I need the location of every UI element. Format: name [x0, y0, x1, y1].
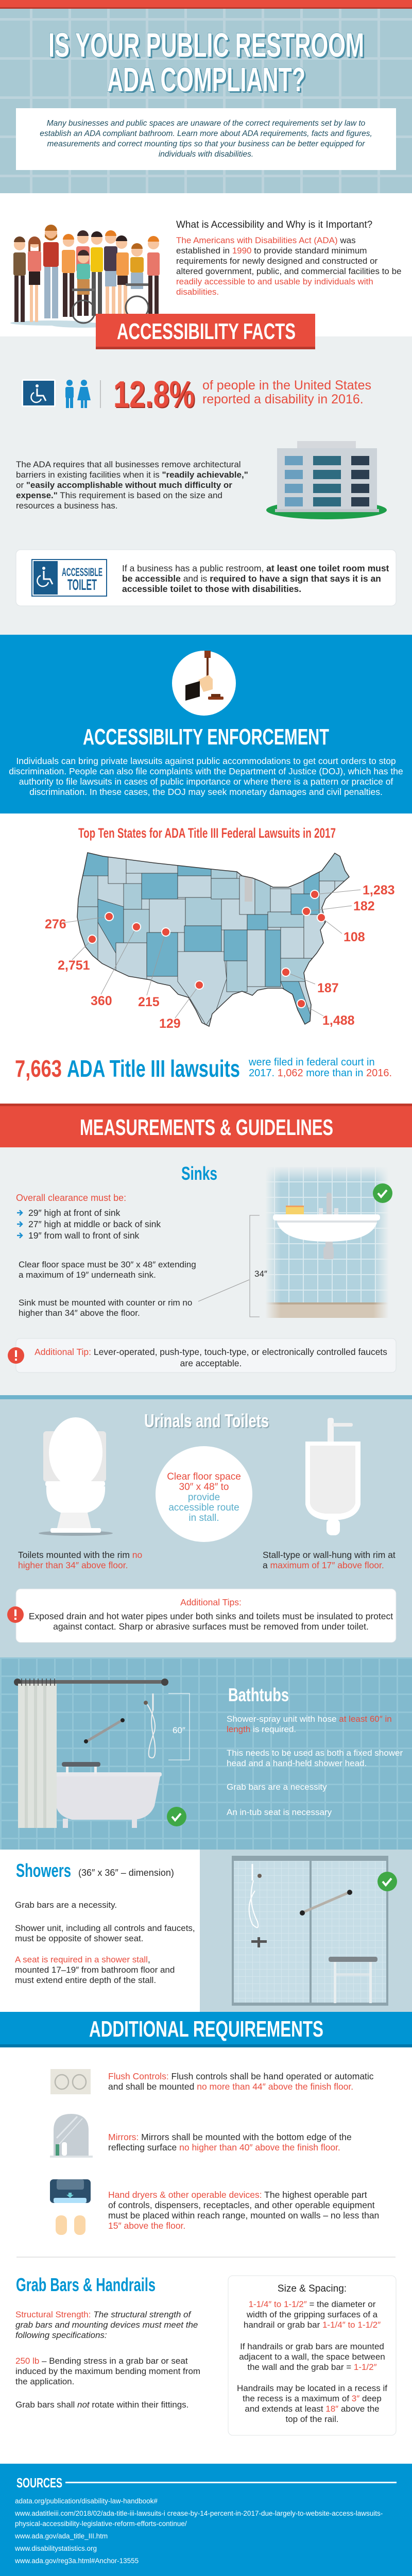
text: enforcement: discrimination. People can also file complaints with the Department of Justice (DOJ), which has the	[9, 766, 403, 776]
text: sink floor space: a maximum of 19″ underneath sink.	[19, 1270, 156, 1280]
heading: sinks: Sinks	[181, 1163, 217, 1184]
text: structural strength	[15, 2310, 200, 2410]
callout: clear floor space oval	[156, 1446, 252, 1542]
icon: accessible toilet sign: ACCESSIBLE	[62, 566, 102, 579]
chart: map markers and labels: 187	[317, 981, 339, 995]
icon: mirror	[50, 2114, 93, 2158]
text: sink mounting: Sink must be mounted with counter or rim no	[19, 1298, 192, 1308]
chart: map markers and labels: 129	[159, 1016, 181, 1031]
text: bathtub details: length is required.	[227, 1724, 296, 1734]
text: ADA definition: established in 1990 to provide standard minimum	[176, 246, 367, 256]
text: oval callout: 30″ x 48″ to	[179, 1482, 229, 1493]
background: urinals light blue	[0, 1395, 412, 1657]
banner: accessibility facts	[96, 314, 315, 349]
heading: additional requirements: ADDITIONAL REQUIREMENTS	[89, 2016, 323, 2042]
illustration: urinal	[305, 1418, 360, 1535]
header: red top bar	[0, 0, 412, 9]
text: size and spacing: handrail or grab bar 1-1/4″ to 1-1/2″	[244, 2320, 381, 2330]
text: mirrors	[108, 2132, 352, 2153]
intro box	[16, 108, 396, 170]
text: shower details: A seat is required in a shower stall,	[15, 1955, 150, 1964]
text: enforcement: authority to file lawsuits in cases of public importance or where there is a pattern or practice of	[19, 776, 393, 787]
illustration: group of people	[10, 225, 196, 328]
chart: US map	[77, 852, 350, 1027]
text: urinal rim	[263, 1550, 396, 1570]
text: size and spacing: Size & Spacing:	[278, 2283, 347, 2294]
text: structural strength: Structural Strength: The structural strength of	[15, 2310, 191, 2319]
background: sinks gray	[0, 1147, 412, 1395]
stat: 7,663 lawsuits: ADA Title III lawsuits	[67, 1055, 240, 1082]
icon: check (bathtub)	[167, 1807, 186, 1826]
text: size and spacing	[237, 2283, 387, 2424]
text: shower details: mounted 17–19″ from bathroom floor and	[15, 1965, 175, 1975]
text: flush controls: Flush Controls: Flush controls shall be hand operated or automatic	[108, 2071, 374, 2081]
bathtub tile background	[0, 1657, 412, 1850]
chart: map markers and labels: 276	[45, 917, 66, 931]
text: faucet tip	[35, 1347, 387, 1368]
icon: wheelchair sign	[22, 379, 56, 407]
chart: map markers and labels: 1,283	[363, 883, 395, 897]
text: sources list: physical-accessibility-legislative-reform-efforts-continue/	[15, 2520, 187, 2528]
text: shower dimension: (36″ x 36″ – dimension)	[78, 1868, 174, 1878]
intro text: measurements and correct mounting tips so that your business can be better equipped for	[47, 140, 365, 148]
text: ADA definition: altered government, public, and commercial facilities to be	[176, 266, 402, 276]
text: ADA definition	[176, 235, 402, 297]
icon: accessible toilet sign	[32, 560, 107, 596]
illustration: shower stall	[232, 1856, 388, 2006]
icon: alert	[8, 1347, 24, 1364]
text: hand dryers: 15″ above the floor.	[108, 2221, 185, 2231]
text: sink floor space	[19, 1260, 196, 1280]
background: showers right panel	[200, 1850, 412, 2012]
text: shower details: Grab bars are a necessity.	[15, 1900, 117, 1910]
text: hand dryers: Hand dryers & other operable devices: The highest operable part	[108, 2190, 367, 2200]
text: sources list: www.ada.gov/reg3a.html#Anchor-13555	[15, 2557, 139, 2565]
text: structural strength: the application.	[15, 2377, 74, 2386]
text: structural strength: 250 lb – Bending stress in a grab bar or seat	[15, 2356, 188, 2366]
background: facts gray	[0, 336, 412, 635]
title	[48, 26, 366, 100]
heading: what is accessibility: What is Accessibility and Why is it Important?	[176, 219, 372, 230]
illustration: bathtub: 60″	[173, 1725, 185, 1735]
text: size and spacing: adjacent to a wall, the space between	[239, 2352, 385, 2362]
icon: alert	[7, 1606, 24, 1623]
text: sink mounting	[19, 1298, 192, 1318]
tip box: pipes	[7, 1589, 396, 1642]
text: enforcement: discrimination. In these cases, the DOJ may seek monetary damages and civil penalties.	[29, 787, 383, 797]
text: ADA definition: disabilities.	[176, 287, 219, 297]
text: architectural barriers: or "easily accomplishable without much difficulty or	[16, 480, 232, 490]
text: bathtub details: Grab bars are a necessity	[227, 1782, 327, 1792]
sink dimension bracket	[198, 1215, 260, 1317]
text: oval callout: accessible route	[168, 1502, 239, 1513]
text: shower details: must be opposite of shower seat.	[15, 1934, 143, 1943]
text: sink bullets: 19″ from wall to front of sink	[28, 1230, 139, 1241]
intro text	[40, 119, 372, 159]
background: measurements red banner	[0, 1104, 412, 1147]
header tile pattern	[0, 9, 412, 193]
text: size and spacing: If handrails or grab bars are mounted	[240, 2342, 384, 2351]
text: bathtub details: An in-tub seat is necessary	[227, 1807, 332, 1817]
text: toilet rim: higher than 34″ above floor.	[18, 1560, 128, 1570]
text: size and spacing: Handrails may be located in a recess if	[237, 2383, 387, 2393]
text: bathtub details: head and a hand-held shower head.	[227, 1758, 367, 1768]
heading: bathtubs: Bathtubs	[228, 1684, 289, 1705]
icon: gavel	[172, 651, 236, 716]
text: urinal rim: a maximum of 17″ above floor.	[263, 1560, 384, 1570]
text: oval callout: Clear floor space	[167, 1471, 241, 1482]
text: architectural barriers	[16, 460, 248, 511]
text: sink bullets: 29″ high at front of sink	[28, 1208, 120, 1218]
text: sink bullets	[28, 1208, 161, 1241]
text: structural strength: grab bars and mounting devices must meet the	[15, 2320, 198, 2330]
text: size and spacing: 1-1/4″ to 1-1/2″ = the diameter or	[249, 2299, 375, 2309]
text: sink mounting: higher than 34″ above the floor.	[19, 1308, 140, 1318]
text: bathtub details: Shower-spray unit with hose at least 60″ in	[227, 1714, 392, 1724]
text: accessible toilet card: be accessible and is required to have a sign that says it is an	[122, 573, 381, 584]
text: faucet tip: Additional Tip: Lever-operated, push-type, touch-type, or electronically controlled faucets	[35, 1347, 387, 1357]
chart: map markers and labels: 360	[91, 994, 112, 1008]
text: flush controls: and shall be mounted no more than 44″ above the finish floor.	[108, 2081, 353, 2092]
label: 34 inch: 34″	[254, 1269, 267, 1279]
stat: 7,663 lawsuits	[15, 1055, 240, 1082]
text: shower details: must extend entire depth of the stall.	[15, 1975, 156, 1985]
text: 12.8% caption: reported a disability in 2016.	[202, 392, 364, 406]
heading: showers: Showers	[16, 1860, 71, 1881]
text: faucet tip: are acceptable.	[180, 1358, 242, 1368]
banner: accessibility facts: ACCESSIBILITY FACTS	[117, 319, 296, 344]
chart: map markers and labels: 1,488	[322, 1013, 355, 1028]
illustration: bathtub	[14, 1679, 190, 1828]
text: shower details	[15, 1900, 195, 1985]
heading: grab bars and handrails: Grab Bars & Handrails	[16, 2274, 156, 2295]
background: header tiles	[0, 0, 412, 193]
text: urinal rim: Stall-type or wall-hung with rim at	[263, 1550, 396, 1560]
text: sources list: adata.org/publication/disability-law-handbook#	[15, 2497, 158, 2505]
text: ADA definition: requirements for newly designed and constructed or	[176, 256, 377, 266]
heading: sources: SOURCES	[16, 2475, 62, 2490]
tip box: faucets	[8, 1338, 396, 1372]
text: structural strength: following specifications:	[15, 2330, 107, 2340]
text: size and spacing: the wall and the grab bar = 1-1/2″	[247, 2362, 377, 2372]
illustration: building	[266, 441, 387, 519]
text: lawsuits caption	[249, 1057, 392, 1079]
text: pipes tip heading: Additional Tips:	[180, 1597, 242, 1607]
background: enforcement blue	[0, 635, 412, 814]
text: enforcement: Individuals can bring private lawsuits against public accommodations to get court orders to stop	[16, 756, 396, 766]
title: ADA COMPLIANT?	[107, 60, 305, 98]
icon: flush controls	[50, 2069, 91, 2094]
text: hand dryers	[108, 2190, 379, 2231]
text: ADA definition: readily accessible to and usable by individuals with	[176, 277, 373, 286]
divider	[16, 2257, 396, 2258]
background: additional requirements banner	[0, 2012, 412, 2047]
text: accessible toilet card: accessible toilet to those with disabilities.	[122, 584, 301, 594]
text: flush controls	[108, 2071, 374, 2092]
text: architectural barriers: The ADA requires that all businesses remove architectural	[16, 460, 241, 469]
icon: restroom people	[65, 380, 91, 408]
text: sources list	[15, 2497, 383, 2565]
icon: check (sink)	[373, 1183, 392, 1203]
text: architectural barriers: expense." This requirement is based on the size and	[16, 490, 222, 500]
text: hand dryers: must be placed within reach range, mounted on walls – no less than	[108, 2210, 379, 2221]
text: enforcement	[9, 756, 403, 797]
illustration: sink	[265, 1166, 389, 1318]
text: 12.8% caption: of people in the United States	[202, 378, 371, 393]
text: architectural barriers: barriers in existing facilities when it is "readily achievable,"	[16, 470, 248, 480]
stat: 12.8%: 12.8%	[114, 375, 196, 416]
illustration: toilet	[39, 1417, 113, 1536]
text: oval callout: provide	[188, 1492, 220, 1503]
text: oval callout: in stall.	[188, 1513, 219, 1523]
stat: 7,663 lawsuits: 7,663	[15, 1055, 62, 1082]
text: sink clearance: Overall clearance must be:	[16, 1193, 126, 1203]
chart: map markers and labels: 215	[138, 995, 160, 1009]
text: lawsuits caption: were filed in federal court in	[249, 1057, 375, 1068]
text: size and spacing: and extends at least 18″ above the	[245, 2404, 380, 2414]
text: sources list: www.adatitleiii.com/2018/02/ada-title-iii-lawsuits-i crease-by-14-percent-in-2017-due-largely-to-website-access-lawsuits-	[15, 2510, 383, 2517]
text: bathtub details: This needs to be used as both a fixed shower	[227, 1748, 403, 1758]
chart: map markers and labels: 2,751	[58, 958, 90, 973]
background: sources blue	[0, 2464, 412, 2576]
stat: 12.8%: 12.8%	[113, 374, 195, 415]
text: size and spacing: top of the rail.	[285, 2414, 339, 2424]
text: size and spacing: width of the gripping surfaces of a	[247, 2310, 377, 2319]
intro text: establish an ADA compliant bathroom. Learn more about ADA requirements, facts and figures,	[40, 129, 372, 138]
text: toilet rim	[18, 1550, 142, 1570]
text: pipes tip body: Exposed drain and hot water pipes under both sinks and toilets must be insulated to protect	[29, 1611, 393, 1621]
text: mirrors: reflecting surface no higher than 40″ above the finish floor.	[108, 2142, 340, 2153]
card: accessible toilet	[16, 550, 396, 606]
text: accessible toilet card: If a business has a public restroom, at least one toilet room must	[122, 563, 389, 573]
text: structural strength: Grab bars shall not rotate within their fittings.	[15, 2400, 188, 2410]
text: 12.8% caption	[202, 378, 371, 406]
icon: accessible toilet sign: TOILET	[67, 577, 97, 594]
text: size and spacing: the recess is a maximum of 3″ deep	[243, 2394, 382, 2403]
text: structural strength: induced by the maximum bending moment from	[15, 2366, 200, 2376]
heading: urinals and toilets: Urinals and Toilets	[145, 1411, 270, 1432]
text: oval callout	[167, 1471, 241, 1523]
heading: urinals and toilets: Urinals and Toilets	[144, 1410, 269, 1431]
card: size and spacing	[228, 2276, 396, 2435]
chart: map markers and labels: 108	[344, 930, 365, 944]
text: lawsuits caption: 2017. 1,062 more than in 2016.	[249, 1067, 392, 1079]
chart: map markers and labels	[45, 883, 395, 1031]
text: sources list: www.disabilitystatistics.org	[15, 2545, 97, 2552]
text: shower details: Shower unit, including all controls and faucets,	[15, 1923, 195, 1933]
icon: check (shower)	[377, 1872, 397, 1891]
intro text: Many businesses and public spaces are unaware of the correct requirements set by law to	[47, 119, 365, 128]
text: mirrors: Mirrors: Mirrors shall be mounted with the bottom edge of the	[108, 2132, 352, 2142]
text: bathtub details	[227, 1714, 403, 1817]
title: ADA COMPLIANT?	[109, 62, 307, 100]
text: sink bullets: 27″ high at middle or back of sink	[28, 1219, 161, 1229]
intro text: individuals with disabilities.	[159, 150, 253, 159]
chart: map markers and labels: 182	[353, 899, 375, 913]
text: accessible toilet card	[122, 563, 389, 594]
text: toilet rim: Toilets mounted with the rim no	[18, 1550, 142, 1560]
text: sources list: www.ada.gov/ada_title_III.htm	[15, 2532, 108, 2540]
text: sink floor space: Clear floor space must be 30″ x 48″ extending	[19, 1260, 196, 1269]
heading: sources	[16, 2475, 397, 2490]
text: hand dryers: of controls, dispensers, receptacles, and other operable equipment	[108, 2200, 375, 2210]
text: pipes tip body: against contact. Sharp or abrasive surfaces must be removed from under toilet.	[53, 1621, 369, 1632]
text: architectural barriers: resources a business has.	[16, 501, 117, 511]
icon: hand dryer	[50, 2179, 91, 2235]
text: ADA definition: The Americans with Disabilities Act (ADA) was	[176, 235, 356, 245]
text: pipes tip body	[29, 1611, 393, 1632]
icon: blue arrows	[17, 1210, 22, 1238]
